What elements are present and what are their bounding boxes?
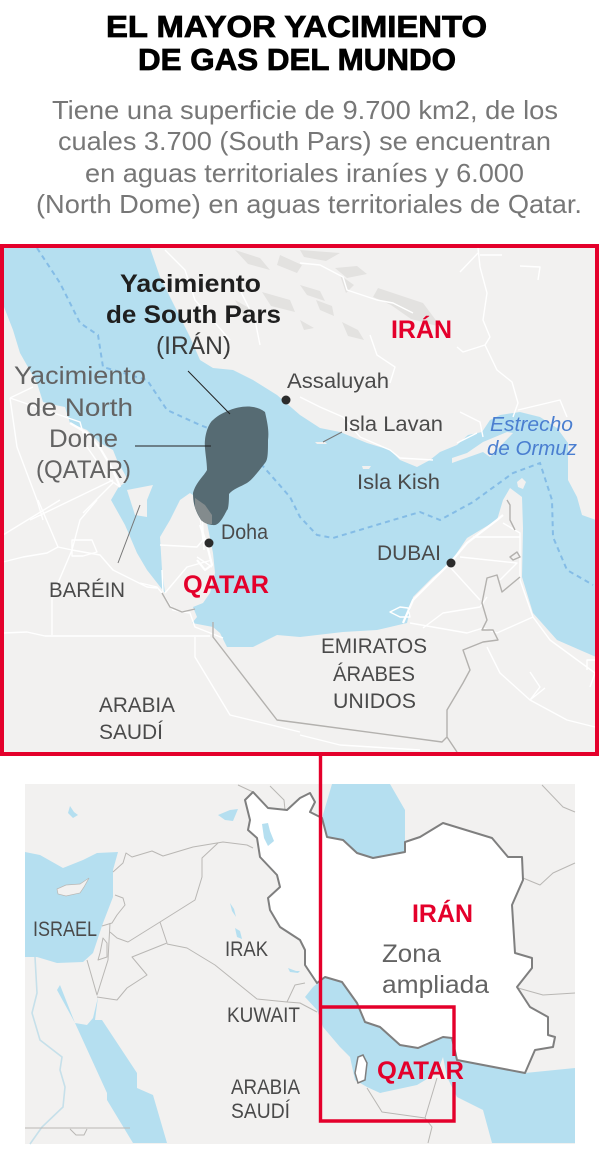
subtitle text: Tiene una superficie de 9.700 km2, de los [52,95,558,125]
labels: places: DUBAI [377,542,441,565]
dashed maritime boundary [37,248,593,585]
labels: places: IRÁN [391,315,452,344]
subtitle text: cuales 3.700 (South Pars) se encuentran [58,126,551,156]
labels: QATAR [377,1057,464,1085]
labels: places: Assaluyah [287,370,389,393]
labels: places: ARABIA [99,694,175,717]
panel: zoomed map of the Persian Gulf [2,246,597,754]
label: South Pars [106,270,281,360]
title: DE GAS DEL MUNDO [138,42,456,77]
labels: ARABIA [231,1076,300,1099]
label: North Dome [14,362,146,484]
label: South Pars: Yacimiento [120,270,261,298]
labels: places [49,315,577,744]
labels: IRAK [225,938,268,961]
title [106,9,487,77]
water [4,248,596,657]
labels: places: Isla Lavan [343,413,443,436]
thick city roads [70,423,503,623]
label: North Dome: Dome [49,425,118,453]
labels: ampliada [382,971,489,999]
labels: places: Doha [221,521,268,544]
Nile [30,957,65,1144]
labels: Zona [382,940,441,968]
label: North Dome: Yacimiento [14,362,146,390]
labels: places: UNIDOS [333,690,416,713]
Qatar highlighted [355,1055,367,1083]
label: North Dome: de North [26,394,133,422]
panel: locator map [25,755,575,1144]
Cyprus [57,878,89,896]
subtitle text [36,95,582,219]
labels: places: ÁRABES [333,663,415,686]
labels [33,899,489,1123]
red locator lines [320,755,454,1121]
leader lines [118,371,342,563]
label: South Pars: (IRÁN) [156,331,231,360]
label: North Dome: (QATAR) [36,456,131,484]
roads [3,248,595,750]
gas field: South Pars / North Dome [193,406,268,525]
subtitle text: (North Dome) en aguas territoriales de Qatar. [36,189,582,219]
labels: places: EMIRATOS [321,635,427,658]
mountains [235,250,441,340]
red frame [2,246,597,754]
Iran [245,792,555,1073]
subtitle text: en aguas territoriales iraníes y 6.000 [85,158,524,188]
land background [25,784,575,1144]
islands [127,432,526,517]
labels: places: Estrecho [490,414,573,436]
labels: SAUDÍ [231,1100,290,1123]
labels: places: SAUDÍ [99,721,163,744]
borders [162,500,520,752]
labels: places: de Ormuz [487,438,577,460]
labels: ISRAEL [33,918,97,941]
labels: places: Isla Kish [357,471,440,494]
label: South Pars: de South Pars [106,301,281,329]
city dots [204,396,456,568]
lake Urmia [262,823,274,846]
borders [25,785,575,1143]
labels: places: BARÉIN [49,579,125,602]
labels: places: QATAR [183,571,269,599]
labels: KUWAIT [227,1004,300,1027]
labels: IRÁN [412,899,473,928]
land background [2,246,597,754]
water bodies [25,784,575,1143]
title: EL MAYOR YACIMIENTO [106,9,487,44]
